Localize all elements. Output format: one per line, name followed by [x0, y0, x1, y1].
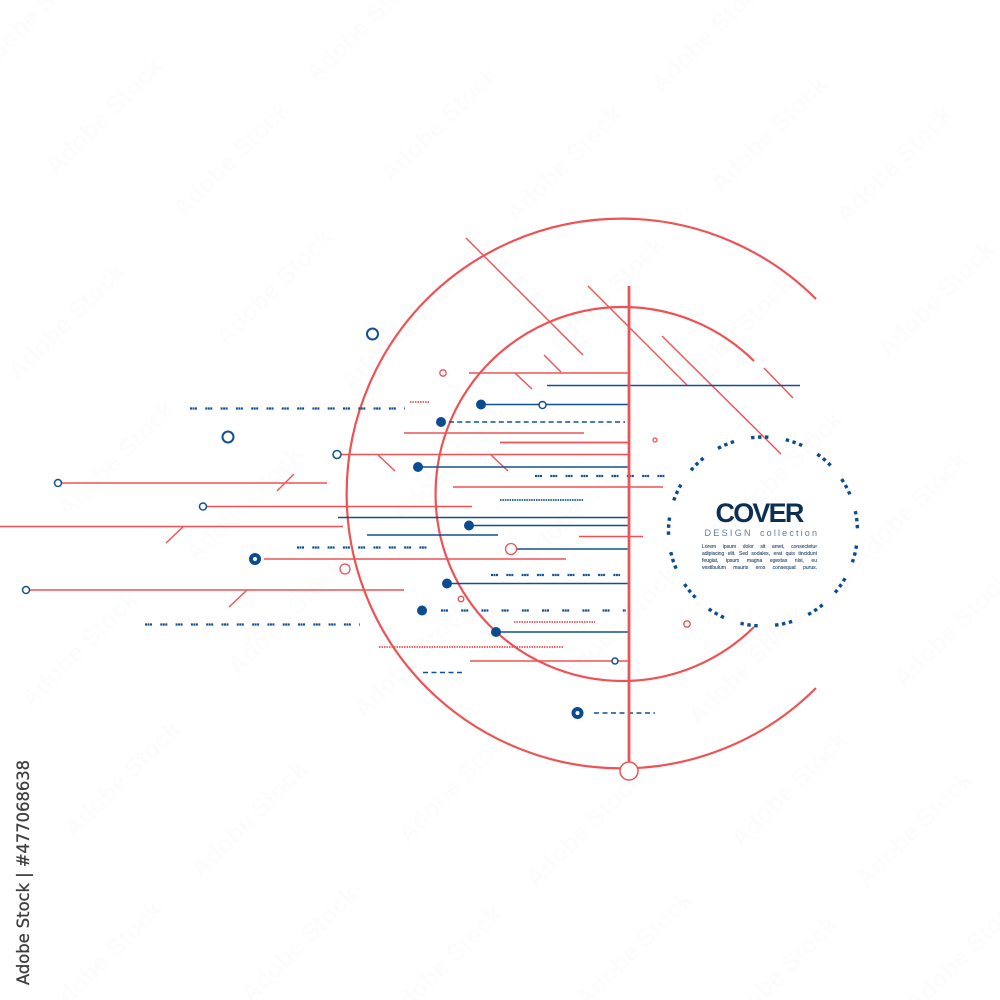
body paragraph: Lorem ipsum dolor sit amet, consectetur [702, 544, 817, 550]
outer red arc [347, 219, 816, 768]
body paragraph: adipiscing elit. Sed sodales, erat quis tincidunt [702, 551, 817, 557]
side credit: Adobe Stock | #477068638 [14, 760, 33, 985]
blue open nodes [22, 328, 618, 664]
triple-dot dashed rows [145, 408, 665, 624]
watermark pattern: Adobe Stock [542, 230, 670, 358]
body paragraph [702, 544, 818, 571]
diagonal red accent lines [466, 238, 793, 454]
watermark pattern: Adobe Stock [180, 440, 308, 568]
blue filled nodes [413, 400, 501, 637]
dashed circle frame [668, 437, 858, 626]
watermark pattern: Adobe Stock [515, 442, 643, 570]
watermark pattern: Adobe Stock [850, 765, 978, 893]
subtitle: DESIGN [704, 528, 750, 538]
blue target nodes [251, 555, 582, 717]
body paragraph: feugiat, ipsum magna egestas nisi, eu [702, 558, 817, 564]
watermark pattern: Adobe Stock [845, 445, 973, 573]
watermark pattern: Adobe Stock [222, 552, 350, 680]
watermark pattern: Adobe Stock [520, 765, 648, 893]
watermark pattern: Adobe Stock [705, 70, 833, 198]
watermark pattern: Adobe Stock [185, 755, 313, 883]
watermark pattern: Adobe Stock [387, 400, 515, 528]
watermark pattern: Adobe Stock [682, 602, 810, 730]
body paragraph: vestibulum mauris eros consequat purus. [702, 565, 817, 571]
watermark pattern: Adobe Stock [500, 100, 628, 228]
axis base circle [620, 762, 638, 780]
subtitle [704, 528, 817, 538]
inner red arc [436, 307, 754, 681]
watermark pattern: Adobe Stock [392, 720, 520, 848]
watermark pattern: Adobe Stock [725, 725, 853, 853]
cover title: COVER [716, 498, 804, 528]
watermark pattern: Adobe Stock [210, 223, 338, 351]
watermark pattern: Adobe Stock [872, 235, 1000, 363]
red open nodes [340, 370, 690, 627]
subtitle: collection [760, 528, 817, 538]
watermark pattern: Adobe Stock [335, 268, 463, 396]
fine dotted lines [379, 402, 595, 647]
blue horizontal lines [338, 386, 800, 713]
watermark pattern: Adobe Stock [167, 95, 295, 223]
central red vertical axis [628, 286, 630, 763]
watermark pattern: Adobe Stock [375, 60, 503, 188]
watermark pattern: Adobe Stock [555, 560, 683, 688]
red horizontal lines [0, 373, 663, 661]
watermark pattern: Adobe Stock [348, 595, 476, 723]
watermark pattern: Adobe Stock [15, 585, 143, 713]
watermark pattern: Adobe Stock [52, 395, 180, 523]
watermark pattern: Adobe Stock [40, 52, 168, 180]
watermark pattern: Adobe Stock [830, 100, 958, 228]
watermark pattern: Adobe Stock [720, 405, 848, 533]
watermark pattern: Adobe Stock [670, 270, 798, 398]
watermark pattern: Adobe Stock [2, 257, 130, 385]
watermark pattern: Adobe Stock [58, 715, 186, 843]
